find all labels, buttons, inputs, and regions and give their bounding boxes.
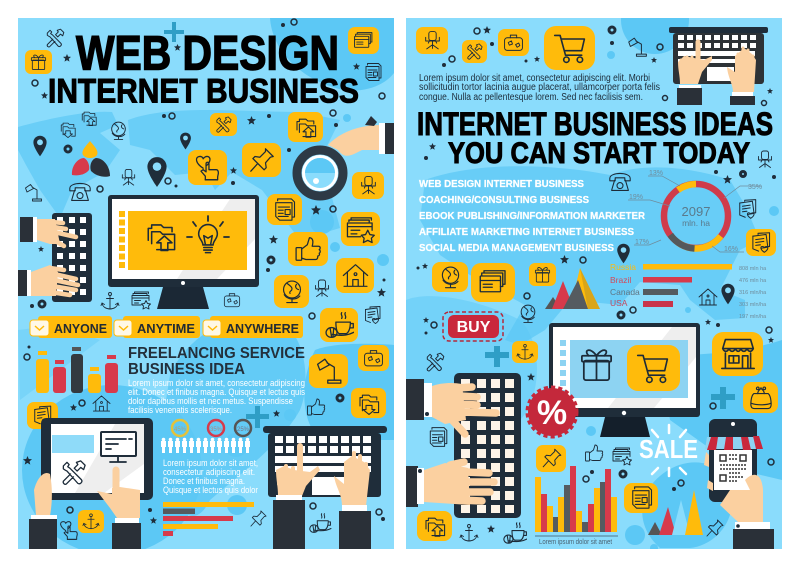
label: sale: [639, 425, 698, 476]
list of business ideas: COACHING/CONSULTING BUSINESS: [419, 195, 589, 206]
text block: statistics description: Lorem ipsum dolor sit amet,: [163, 458, 258, 468]
icon: touch tile: [188, 150, 227, 185]
icon: thumbs up: [308, 399, 325, 415]
icon: map pin: [721, 284, 735, 304]
icon: folder tile: [288, 112, 323, 142]
keyboard with two hands: [18, 213, 92, 302]
laptop with typing hands: [669, 27, 768, 105]
heading: freelancing service: [128, 345, 305, 378]
icon: coffee tile: [320, 308, 358, 342]
icon: folder download: [61, 123, 75, 138]
list of business ideas: SOCIAL MEDIA MANAGEMENT BUSINESS: [419, 243, 614, 254]
caption: Lorem ipsum dolor sit amet: [539, 539, 612, 546]
icon: star card tile: [341, 212, 380, 246]
chart: percent rings: [172, 420, 251, 436]
tag: anyone: ANYONE: [54, 321, 107, 336]
icon: anchor: [101, 292, 119, 309]
button: buy: BUY: [457, 319, 491, 336]
icon: cards tile: [471, 263, 515, 302]
panel: left poster: [18, 18, 394, 555]
icon: globe: [521, 305, 535, 322]
icon: pin tile: [242, 143, 281, 177]
icon: thumbs up tile: [288, 232, 328, 266]
text block: statistics description: Quisque et lectus quis dolor: [163, 485, 258, 495]
icon tiles: right poster: [416, 26, 778, 543]
icon: shop tile: [712, 332, 763, 376]
keyboard with two hands: [406, 373, 521, 518]
icon: tools tile: [210, 113, 237, 136]
icon: star card: [613, 448, 632, 465]
laptop with typing hands: [263, 426, 387, 549]
tag: anywhere: ANYWHERE: [226, 321, 299, 336]
text block: statistics description: [163, 458, 258, 495]
icon: tools on tablet: [63, 461, 85, 484]
tag: anywhere: [203, 316, 303, 338]
chart: donut 2097 mln ha: 16%: [724, 246, 738, 253]
icon: suitcase: [224, 294, 240, 307]
text block: freelancing description: elit. Donec et finibus magna. Quisque et lectus quis: [128, 387, 305, 398]
tablet with hands: [29, 418, 153, 549]
icon: tools: [427, 353, 444, 371]
chart: country bars: 303 mln/ha: [739, 302, 767, 308]
chart: triangle peaks top: [545, 268, 600, 309]
icon: anchor: [460, 524, 478, 541]
icon tiles: left poster: [25, 27, 389, 539]
icon: tools: [47, 29, 64, 47]
icon: pin tile: [536, 445, 566, 472]
chart: donut 2097 mln ha: 19%: [629, 194, 643, 201]
icon: wallet tile: [743, 382, 778, 413]
tag: anytime: ANYTIME: [137, 321, 195, 336]
icon: map pin small: [33, 136, 47, 156]
tag: anytime: [114, 316, 200, 338]
chart: percent rings: 35%: [210, 427, 223, 433]
text block: intro: Lorem ipsum dolor sit amet, consectetur adipiscing elit. Morbi: [419, 73, 650, 84]
chart: country bars: Brazil: [610, 275, 631, 285]
icon: folder upload large: [148, 225, 175, 250]
icon: coffee: [310, 514, 331, 532]
icon: cards tile: [348, 27, 379, 54]
chart: cylinder bars: [36, 347, 118, 393]
icon: house tile: [336, 258, 374, 293]
chart: country bars: 197 mln/ha: [739, 314, 767, 320]
icon: house: [93, 396, 110, 411]
chart: horizontal bars: [163, 502, 254, 536]
badge: percent: %: [537, 394, 567, 432]
chart: petal pie: [72, 141, 110, 177]
heading: freelancing service: BUSINESS IDEA: [128, 361, 245, 378]
icon: lamp: [26, 184, 42, 201]
chart: donut 2097 mln ha: 13%: [649, 170, 663, 177]
icon: map pin large: [147, 157, 167, 187]
phone with shop awning and qr code: [704, 419, 774, 549]
text block: statistics description: consectetur adipiscing elit.: [163, 467, 255, 477]
icon: tools tile: [462, 40, 487, 63]
list of business ideas: EBOOK PUBLISHING/INFORMATION MARKETER: [419, 211, 646, 222]
chart: percent rings: 25%: [237, 427, 250, 433]
icon: document heart tile: [746, 229, 776, 256]
chart: country bars: 476 mln ha: [739, 278, 767, 284]
icon: gift tile: [529, 263, 556, 286]
desktop monitor with upload and idea: [108, 195, 259, 309]
icon: document: [366, 64, 381, 80]
icon: suitcase tile: [358, 345, 389, 371]
icon: anchor tile: [512, 341, 538, 363]
icon: document tile: [267, 194, 302, 225]
icon: folder upload: [82, 112, 96, 126]
text block: freelancing description: Lorem ipsum dolor sit amet, consectetur adipiscing: [128, 378, 305, 389]
icon: chair: [758, 151, 772, 168]
heading: freelancing service: FREELANCING SERVICE: [128, 345, 305, 362]
chart: country bars: 316 mln/ha: [739, 290, 767, 296]
icon: chair: [122, 169, 135, 185]
chart: country bars: [610, 262, 767, 320]
icon: folder download tile: [351, 388, 386, 418]
icon: pin: [707, 520, 723, 536]
chart: country bars: Canada: [610, 287, 640, 297]
chart: column bars: [535, 466, 618, 546]
icon: touch: [61, 522, 77, 539]
icon: telephone: [70, 183, 90, 200]
text block: intro: congue. Nulla ac pellentesque lorem. Sed nec facilisis sem.: [419, 92, 643, 103]
subtitle: internet business: INTERNET BUSINESS: [48, 72, 359, 110]
icon: pin: [251, 511, 266, 526]
list of business ideas: [419, 179, 646, 254]
label: sale: SALE: [639, 434, 698, 464]
icon: document heart: [366, 306, 380, 324]
icon: lamp tile: [309, 354, 348, 388]
text block: freelancing description: dolor dapibus mollis et nec metus. Suspendisse: [128, 396, 293, 407]
icon: folder tile: [417, 511, 452, 541]
icon: gift large: [582, 350, 611, 380]
chart: donut 2097 mln ha: 2097: [682, 204, 710, 219]
chart: donut 2097 mln ha: [628, 170, 762, 253]
tag: anyone: [30, 316, 112, 338]
chart: country bars: USA: [610, 298, 628, 308]
chart: donut 2097 mln ha: 17%: [635, 239, 649, 246]
icon: gift tile: [25, 50, 52, 74]
panel: right poster: [406, 0, 782, 552]
desktop monitor with gift and cart: [549, 323, 700, 437]
text block: intro: [419, 73, 660, 103]
icon: map pin: [617, 244, 630, 263]
icon: anchor tile: [78, 510, 104, 533]
icon: thumbs up: [586, 445, 603, 461]
icon: light bulb: [187, 216, 229, 253]
feature tags: [30, 316, 303, 338]
chart: country bars: 808 mln ha: [739, 266, 767, 272]
icon: document: [430, 428, 447, 446]
list of business ideas: WEB DESIGN INTERNET BUSINESS: [419, 179, 584, 190]
icon: document heart tile: [27, 402, 58, 429]
text block: intro: sollicitudin tortor lacinia augue placerat, ullamcorper porta felis: [419, 82, 660, 93]
text block: freelancing description: [128, 378, 305, 416]
icon: star card: [132, 292, 150, 309]
list of business ideas: AFFILIATE MARKETING INTERNET BUSINESS: [419, 227, 634, 238]
chart: triangle peaks bottom: [648, 490, 703, 535]
title: web design: WEB DESIGN: [76, 28, 339, 80]
decorative stars and dots: [416, 26, 776, 533]
icon: cart tile large: [627, 345, 680, 391]
chart: country bars: Russia: [610, 262, 636, 272]
icon: chair: [316, 280, 328, 296]
decorative stars and dots: [23, 19, 386, 524]
icon: map pin medium: [180, 133, 191, 149]
icon: telephone: [610, 173, 630, 190]
icon: chair tile: [352, 172, 384, 199]
icon: globe tile: [274, 275, 309, 308]
icon: document heart: [740, 200, 756, 218]
people row: [161, 438, 250, 453]
icon: globe tile: [432, 262, 468, 292]
chart: donut 2097 mln ha: 35%: [748, 184, 762, 191]
icon: monitor on tablet: [101, 432, 136, 462]
title: you can start today: YOU CAN START TODAY: [448, 137, 750, 170]
icon: suitcase tile: [498, 29, 529, 56]
qr code: [720, 455, 746, 481]
chart: donut 2097 mln ha: mln. ha: [682, 218, 710, 228]
text block: freelancing description: facilisis venenatis scelerisque.: [128, 405, 232, 416]
icon: lamp: [629, 38, 646, 56]
icon: chair tile: [416, 27, 448, 54]
button: buy: [443, 312, 503, 341]
icon: house: [699, 289, 717, 305]
text block: statistics description: Donec et finibus magna.: [163, 476, 245, 486]
icon: shopping cart tile: [544, 26, 595, 70]
magnifier with hand: [297, 116, 394, 196]
icon: document tile: [624, 483, 658, 513]
chart: percent rings: 45%: [174, 427, 187, 433]
badge: percent: [528, 388, 576, 436]
icon: globe: [112, 122, 125, 139]
icon: coffee: [504, 523, 527, 543]
